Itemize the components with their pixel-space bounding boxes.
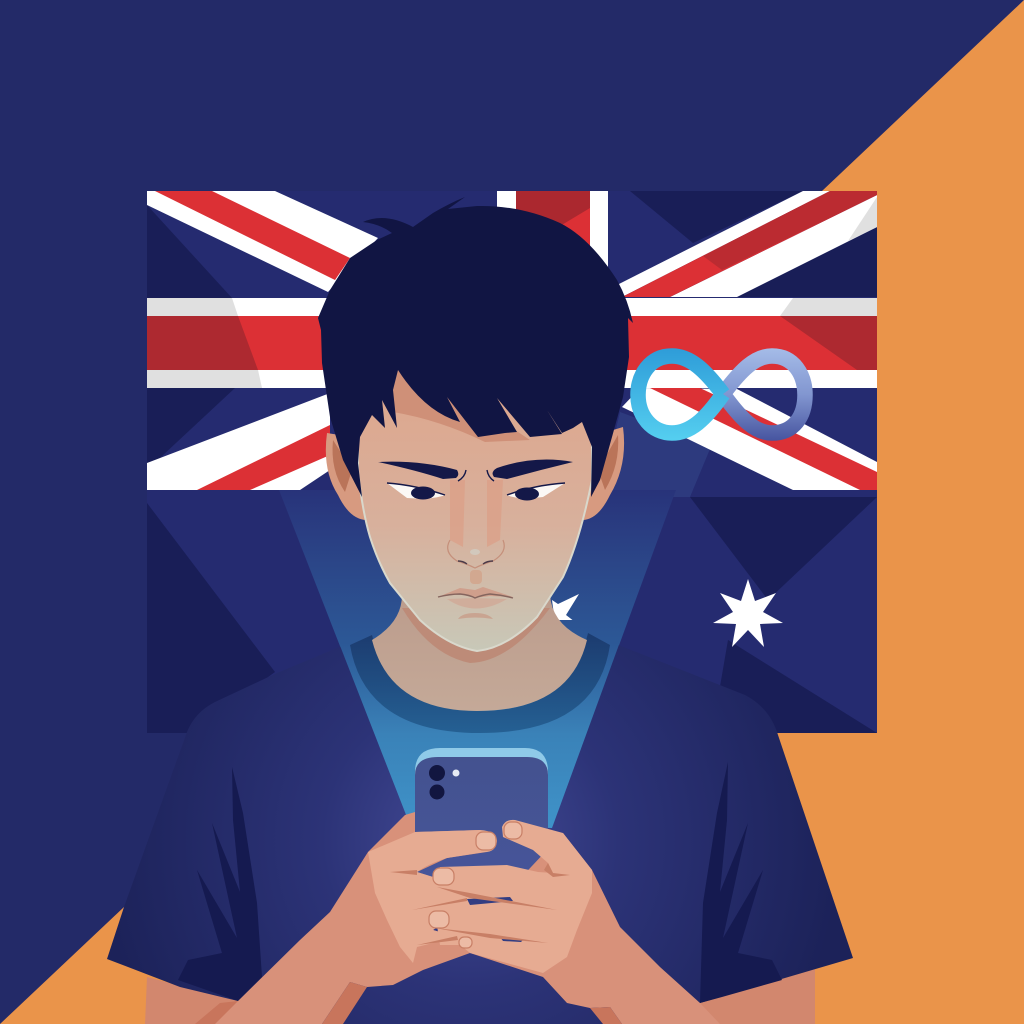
t-shirt: [107, 633, 853, 1024]
left forearm and hand base: [215, 812, 497, 1024]
nose highlight: [470, 549, 480, 555]
left forearm dark strip: [322, 982, 367, 1024]
flag shading: [147, 191, 877, 370]
fingernails: [429, 822, 522, 948]
person: [107, 197, 853, 1024]
left ear: [326, 433, 370, 520]
left hand light area: [368, 830, 497, 963]
right forearm dark strip: [590, 1007, 622, 1024]
right shirt fold: [700, 762, 782, 1003]
lower lip: [447, 598, 507, 608]
panel: Australian flag: [147, 191, 877, 733]
infinity right loop: [723, 356, 805, 433]
flag white band shading: [147, 197, 877, 388]
icon: infinity loop: [638, 356, 805, 433]
hair: [318, 197, 633, 497]
finger gaps: [467, 897, 523, 942]
hair shadow on forehead: [392, 368, 530, 442]
partly hidden star: [552, 594, 588, 633]
right ear: [580, 427, 624, 520]
philtrum: [470, 570, 482, 584]
left sleeve skin shadow: [195, 1001, 238, 1024]
neck shadow under jaw: [402, 608, 550, 663]
right eye: [507, 483, 565, 498]
left nose bridge shading: [450, 480, 465, 547]
collar: [350, 633, 610, 733]
right nose bridge shading: [487, 480, 503, 547]
union jack white stripes: [147, 191, 877, 490]
face: [358, 370, 592, 651]
right inner ear: [598, 435, 618, 490]
left shirt fold: [178, 767, 262, 1001]
under-lip shade: [458, 613, 493, 619]
flag field: [147, 191, 877, 733]
neck: [372, 595, 587, 711]
left iris: [411, 486, 435, 500]
nostrils: [458, 561, 493, 564]
left inner ear: [332, 440, 352, 492]
left eyebrow: [378, 462, 458, 479]
upper lip: [438, 587, 513, 598]
left lid line: [387, 483, 445, 495]
nose outline: [448, 540, 504, 568]
phone body: [415, 757, 548, 885]
right forearm: [470, 833, 720, 1024]
union jack red stripes: [147, 191, 877, 490]
flag star: [713, 579, 783, 647]
flash: [452, 770, 460, 776]
cone over shirt: [330, 620, 628, 828]
camera lenses: [429, 765, 445, 800]
palm fill between fingers: [430, 880, 530, 945]
lip line: [438, 594, 513, 598]
finger creases: [390, 863, 570, 945]
right lid line: [507, 483, 565, 495]
right iris: [515, 488, 539, 500]
upper arms below sleeves: [145, 960, 815, 1024]
right eyebrow: [493, 460, 573, 479]
right hand: [428, 820, 592, 973]
left eye: [387, 483, 445, 499]
infinity left loop: [638, 356, 723, 433]
lighter navy facet beside ear: [600, 412, 710, 497]
light cone from phone: [279, 490, 676, 828]
phone glow edge: [415, 748, 548, 800]
brow furrows: [458, 470, 494, 481]
darker flag facets: [147, 191, 877, 733]
